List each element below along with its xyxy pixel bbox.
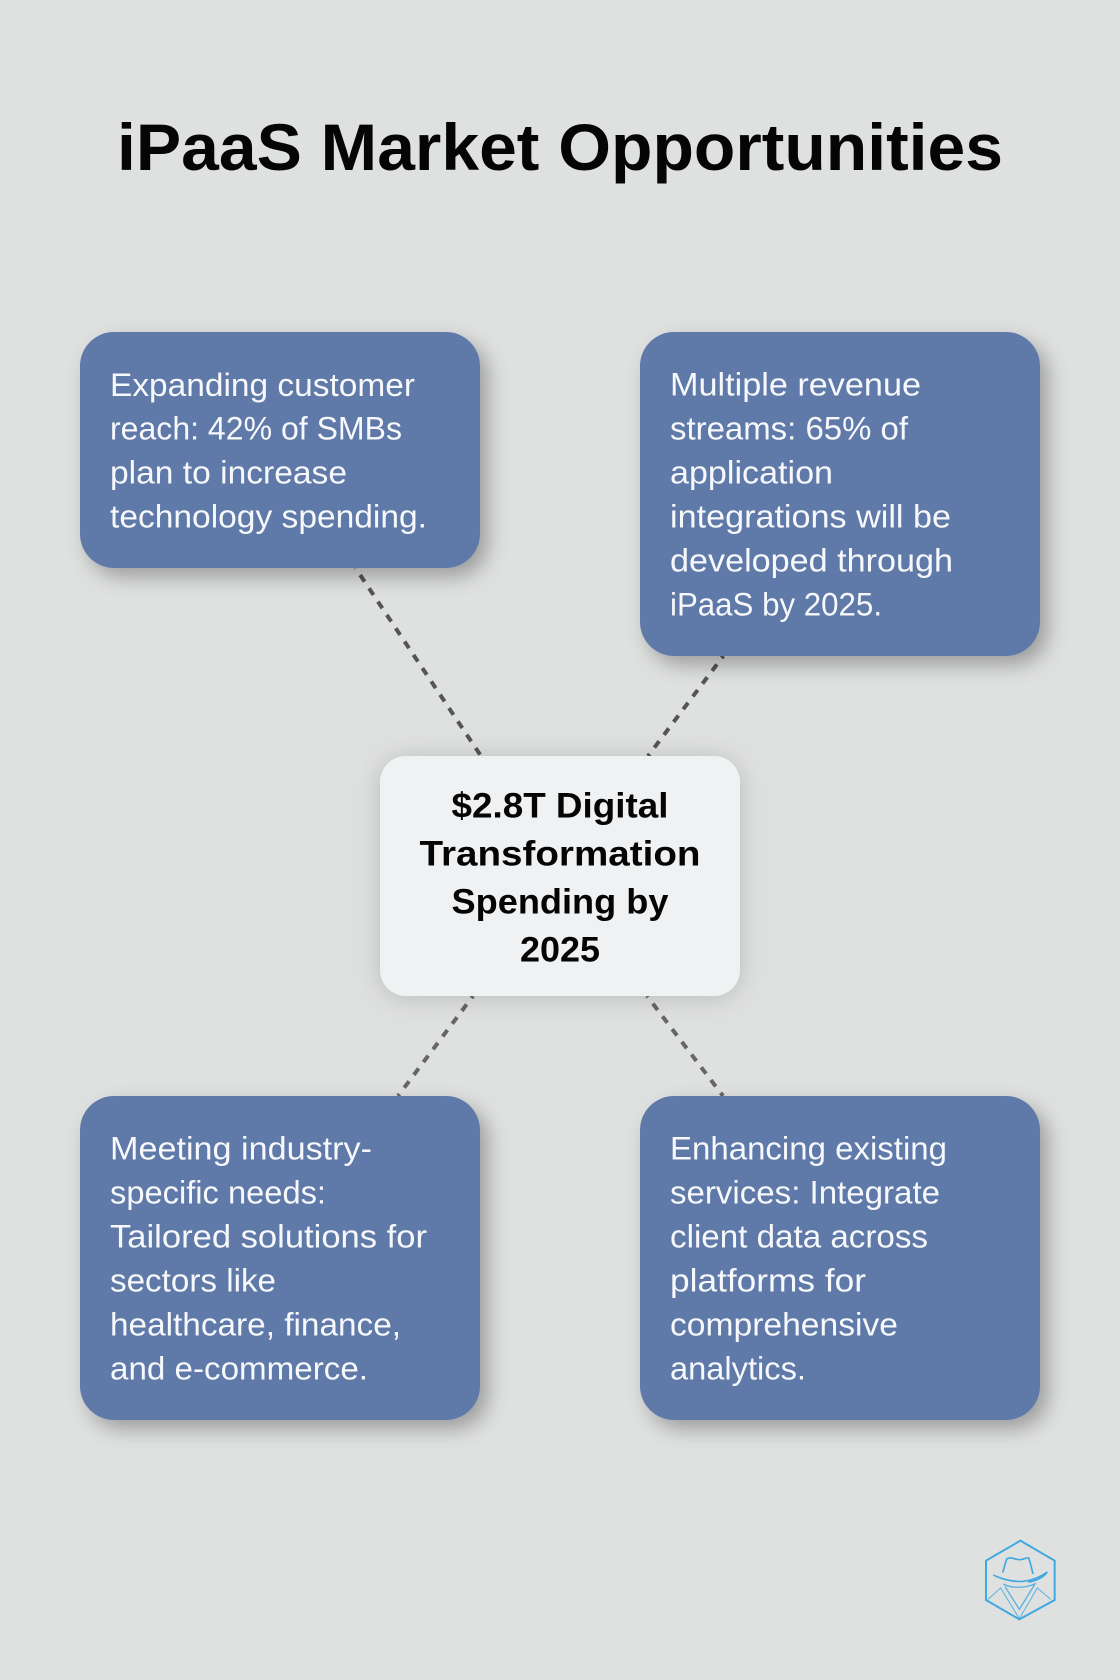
- panel: expanding customer reach: technology spending.: [110, 498, 427, 534]
- panel: central spending figure: 2025: [520, 930, 600, 970]
- panel: enhancing existing services: [640, 1096, 1040, 1420]
- panel: enhancing existing services: Enhancing existing: [670, 1130, 947, 1166]
- panel: central spending figure: Transformation: [420, 834, 700, 874]
- panel: enhancing existing services: client data across: [670, 1218, 928, 1254]
- panel: central spending figure: Spending by: [452, 882, 669, 922]
- panel: expanding customer reach: plan to increase: [110, 454, 347, 490]
- panel: central spending figure: [380, 756, 740, 996]
- panel: enhancing existing services: platforms for: [670, 1262, 866, 1298]
- panel: enhancing existing services: services: Integrate: [670, 1174, 940, 1210]
- panel: industry-specific needs: specific needs:: [110, 1174, 326, 1210]
- panel: industry-specific needs: and e-commerce.: [110, 1350, 368, 1386]
- panel: industry-specific needs: Meeting industry-: [110, 1130, 372, 1166]
- panel: multiple revenue streams: [640, 332, 1040, 656]
- connector: top left: [356, 568, 481, 756]
- panel: multiple revenue streams: application: [670, 454, 833, 490]
- panel: multiple revenue streams: iPaaS by 2025.: [670, 586, 882, 622]
- panel: industry-specific needs: sectors like: [110, 1262, 276, 1298]
- panel: multiple revenue streams: developed through: [670, 542, 953, 578]
- title: iPaaS Market Opportunities: [117, 110, 1003, 184]
- panel: enhancing existing services: analytics.: [670, 1350, 806, 1386]
- panel: expanding customer reach: [80, 332, 480, 568]
- panel: industry-specific needs: [80, 1096, 480, 1420]
- connector: top right: [648, 656, 723, 756]
- panel: industry-specific needs: healthcare, finance,: [110, 1306, 401, 1342]
- connector: bottom left: [398, 996, 473, 1096]
- connector: bottom right: [647, 996, 723, 1096]
- icon: hexagon logo with hat: [986, 1541, 1055, 1619]
- panel: expanding customer reach: Expanding customer: [110, 367, 415, 403]
- panel: enhancing existing services: comprehensive: [670, 1306, 898, 1342]
- panel: industry-specific needs: Tailored solutions for: [110, 1218, 427, 1254]
- panel: multiple revenue streams: Multiple revenue: [670, 366, 921, 402]
- panel: central spending figure: $2.8T Digital: [452, 786, 668, 826]
- panel: expanding customer reach: reach: 42% of SMBs: [110, 410, 402, 446]
- panel: multiple revenue streams: integrations will be: [670, 498, 951, 534]
- panel: multiple revenue streams: streams: 65% of: [670, 410, 908, 446]
